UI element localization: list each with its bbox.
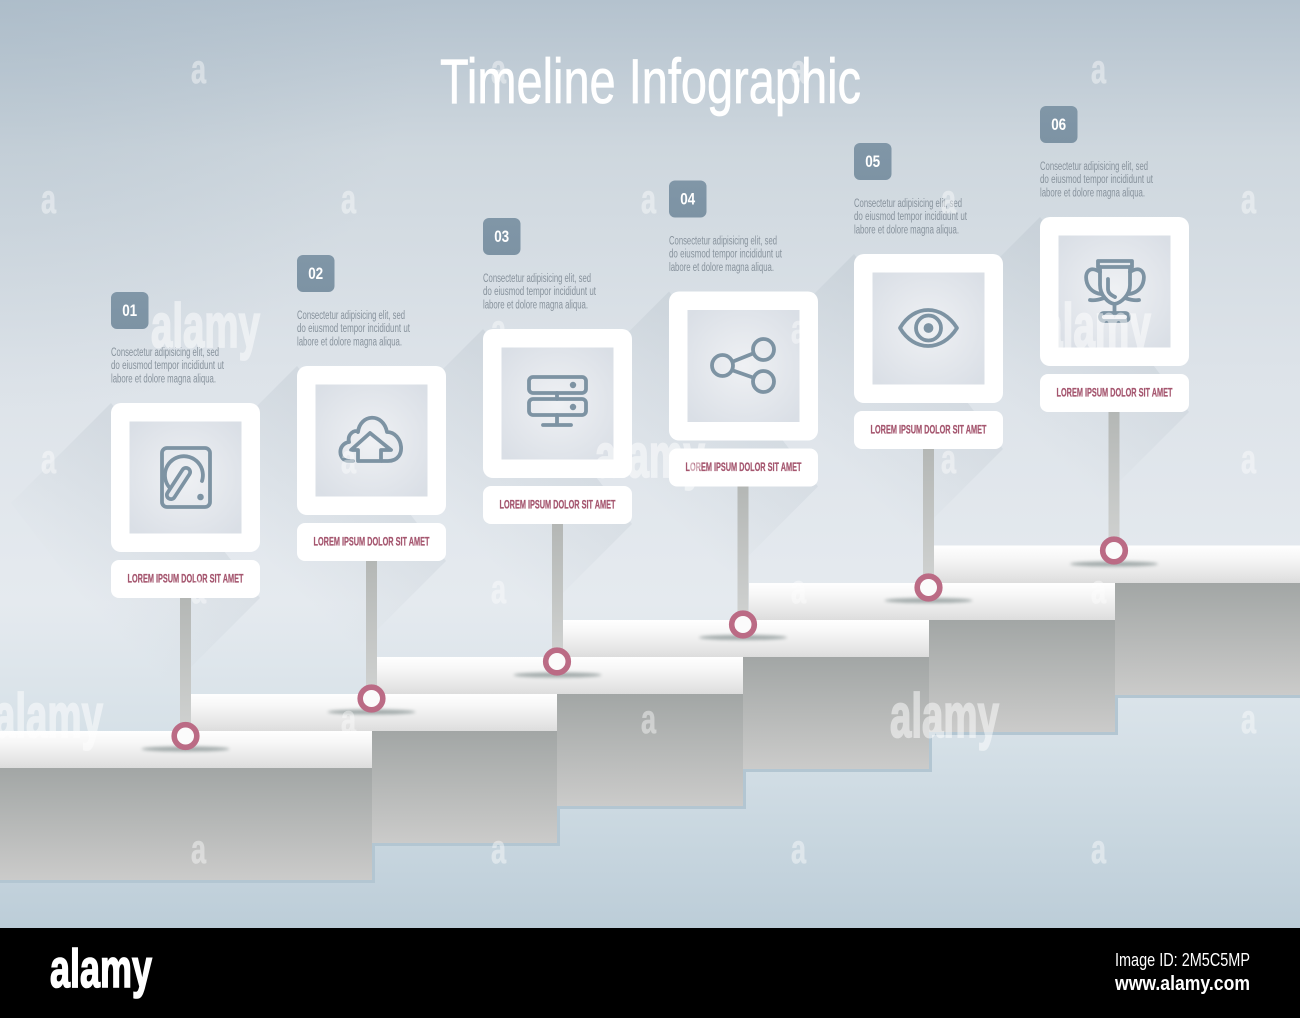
pole and marker 01 [142,598,230,752]
watermark: a [491,566,507,612]
card 04 [669,292,818,440]
label 01: LOREM IPSUM DOLOR SIT AMET [128,574,244,586]
milestone 05 [854,143,1003,603]
label 04 [669,448,818,486]
description 02 [297,310,411,348]
pole and marker 06 [1070,412,1158,567]
website: www.alamy.com [1114,973,1250,995]
description 01: labore et dolore magna aliqua. [111,374,216,386]
number badge 03: 03 [494,227,509,246]
card 05 [854,254,1003,403]
number badge 05 [854,143,892,180]
watermark: a [1091,46,1107,92]
description 03 [483,273,597,312]
number badge 06: 06 [1051,115,1066,134]
description 01 [111,347,225,386]
watermark: a [941,176,957,222]
watermark: alamy [595,422,705,491]
number badge 03 [483,218,520,255]
card 03 [483,329,632,478]
step 3 [377,657,746,809]
icon: server [529,377,586,425]
watermark: a [341,696,357,742]
watermark: a [1091,566,1107,612]
watermark: a [641,176,657,222]
footer logo: alamy [50,939,152,999]
description 04: labore et dolore magna aliqua. [669,262,774,274]
watermark: a [791,826,807,872]
label 06 [1040,374,1189,412]
icon: cloud upload [340,418,401,461]
long shadows [11,217,1189,698]
icon: eye [900,310,957,346]
label 03: LOREM IPSUM DOLOR SIT AMET [500,500,616,512]
title: Timeline Infographic [440,47,861,117]
description 05: do eiusmod tempor incididunt ut [854,211,968,223]
watermark: a [941,436,957,482]
description 06: Consectetur adipisicing elit, sed [1040,161,1148,173]
watermark: alamy [890,682,999,751]
icon: hard drive [162,448,210,507]
watermark: a [491,306,507,352]
pole and marker 04 [699,486,787,640]
milestone 04 [669,180,818,640]
number badge 05: 05 [865,152,880,171]
label 05 [854,411,1003,449]
pole and marker 03 [514,524,602,678]
step 5 [749,583,1118,735]
description 03: labore et dolore magna aliqua. [483,300,588,312]
watermark: a [1241,696,1257,742]
milestone 02 [297,255,446,715]
watermark: a [41,436,57,482]
description 01: do eiusmod tempor incididunt ut [111,360,225,372]
label 06: LOREM IPSUM DOLOR SIT AMET [1056,388,1172,400]
description 06 [1040,161,1154,200]
description 06: labore et dolore magna aliqua. [1040,188,1145,200]
pole and marker 05 [884,449,972,603]
description 04: Consectetur adipisicing elit, sed [669,236,777,248]
label 02: LOREM IPSUM DOLOR SIT AMET [314,536,430,548]
description 05 [854,198,968,236]
watermark: a [491,46,507,92]
number badge 01: 01 [122,301,137,320]
label 05: LOREM IPSUM DOLOR SIT AMET [870,424,986,436]
label 03 [483,486,632,524]
watermark: a [191,46,207,92]
watermark: alamy [151,292,260,361]
milestone 06 [1040,106,1189,567]
description 03: Consectetur adipisicing elit, sed [483,273,591,285]
step 4 [563,620,932,772]
step 2 [191,694,560,846]
label 01 [111,560,260,598]
number badge 04: 04 [680,190,696,208]
card 01 [111,403,260,552]
milestone 03 [483,218,632,678]
step 1 [0,731,375,883]
description 04: do eiusmod tempor incididunt ut [669,248,783,260]
watermark: a [791,306,807,352]
milestone 01 [111,292,260,752]
description 04 [669,236,783,274]
watermark: a [41,176,57,222]
watermark: a [1241,436,1257,482]
watermark: a [641,696,657,742]
watermark: a [491,826,507,872]
label 02 [297,523,446,561]
watermark: a [1241,176,1257,222]
card 06 [1040,217,1189,366]
pole and marker 02 [328,561,416,715]
watermark: a [191,566,207,612]
watermark: a [791,46,807,92]
watermark: a [1091,826,1107,872]
icon: share nodes [712,339,774,392]
number badge 06 [1040,106,1078,143]
card 02 [297,366,446,515]
number badge 01 [111,292,148,329]
description 01: Consectetur adipisicing elit, sed [111,347,219,359]
watermark: a [191,826,207,872]
description 02: do eiusmod tempor incididunt ut [297,323,411,335]
description 02: Consectetur adipisicing elit, sed [297,310,405,322]
number badge 02 [297,255,334,292]
description 06: do eiusmod tempor incididunt ut [1040,174,1154,186]
number badge 04 [669,180,706,218]
number badge 02: 02 [308,264,323,283]
footer bar [0,928,1300,1018]
watermark: a [341,436,357,482]
description 02: labore et dolore magna aliqua. [297,336,402,348]
image id: Image ID: 2M5C5MP [1115,950,1250,970]
watermark: alamy [1041,292,1151,361]
icon: trophy [1086,261,1144,321]
watermark [0,46,1257,872]
description 05: labore et dolore magna aliqua. [854,224,959,236]
description 05: Consectetur adipisicing elit, sed [854,198,962,210]
watermark: a [341,176,357,222]
step 6 [934,546,1300,698]
staircase [0,546,1300,883]
description 03: do eiusmod tempor incididunt ut [483,286,597,298]
label 04: LOREM IPSUM DOLOR SIT AMET [686,462,802,474]
watermark: a [791,566,807,612]
